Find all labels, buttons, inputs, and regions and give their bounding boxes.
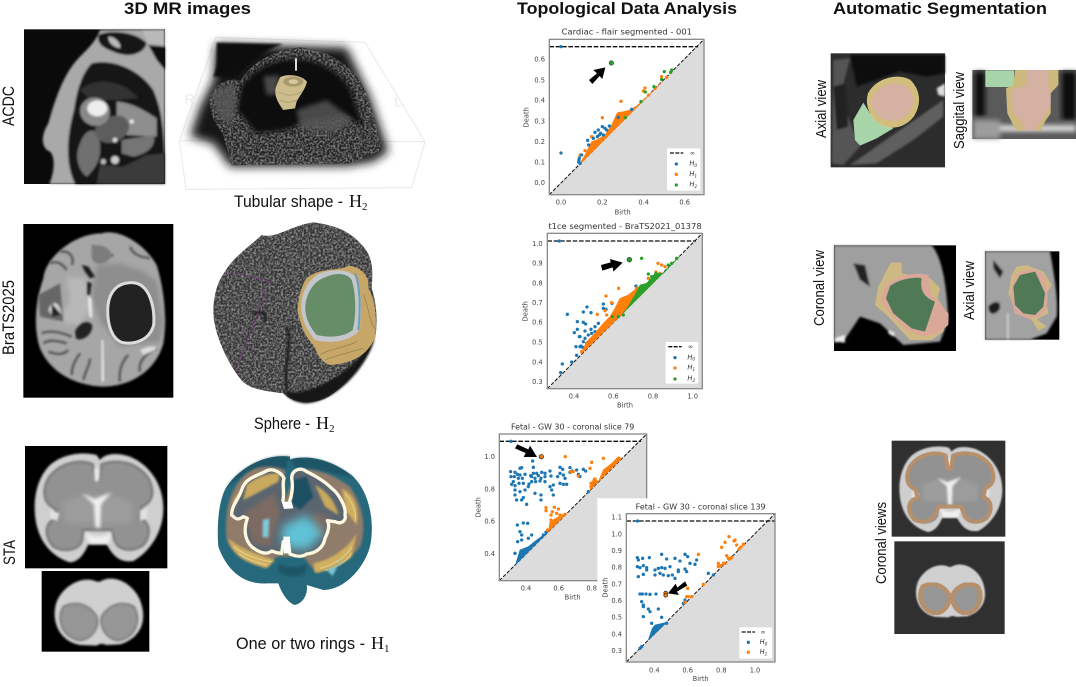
gold and brown outer surface <box>226 467 363 573</box>
y ticks <box>534 56 545 187</box>
caption: One or two rings: 1 <box>384 643 390 655</box>
edema overlay <box>875 263 948 340</box>
label: Saggital view: Saggital view <box>951 72 968 149</box>
chart: Cardiac persistence diagram <box>522 28 704 216</box>
highlighted H1 point <box>539 454 543 459</box>
myocardium ring <box>867 77 919 127</box>
x ticks: 0.4 <box>638 198 649 206</box>
legend: 1 <box>692 367 695 373</box>
y ticks: 0.3 <box>532 378 543 386</box>
x ticks: Birth <box>565 593 581 601</box>
H0 points <box>511 441 588 564</box>
y ticks <box>532 240 543 386</box>
pink overlay <box>1011 70 1051 131</box>
x ticks: 0.2 <box>597 198 608 206</box>
H1 points <box>579 77 667 165</box>
legend: H <box>689 170 694 178</box>
legend: 0 <box>692 357 695 363</box>
y ticks: 0.4 <box>611 630 622 638</box>
x ticks: 0.8 <box>586 585 597 593</box>
white marker <box>295 58 297 71</box>
title: Cardiac - flair segmented - 001 <box>562 28 692 37</box>
legend: 1 <box>765 651 768 657</box>
title: Fetal - GW 30 - coronal slice 139 <box>636 502 766 511</box>
arrow <box>601 259 623 272</box>
edema overlay <box>1008 265 1052 331</box>
interior region inside ring <box>232 469 345 556</box>
x ticks: 0.6 <box>553 585 564 593</box>
legend: H <box>760 648 765 656</box>
x ticks: 0.6 <box>679 198 690 206</box>
gray rim <box>301 270 361 342</box>
y ticks: 0.4 <box>484 550 495 558</box>
y axis label: Death <box>475 497 483 517</box>
title: t1ce segmented - BraTS2021_01378 <box>548 222 702 231</box>
H0 points <box>637 521 713 648</box>
legend: H <box>689 160 694 168</box>
y ticks: 0.9 <box>532 260 543 268</box>
label: Coronal views: Coronal views <box>873 502 890 584</box>
green core <box>305 274 355 337</box>
x ticks: 0.4 <box>649 666 660 674</box>
arrow <box>668 581 687 595</box>
label: Coronal view: Coronal view <box>811 250 828 326</box>
highlighted H2 point <box>609 61 613 65</box>
y axis label: Death <box>601 578 609 598</box>
x ticks: 1.0 <box>687 392 698 400</box>
y ticks: 1.0 <box>484 453 495 461</box>
legend: H <box>760 638 765 646</box>
chart: Fetal slice 79 persistence diagram <box>475 423 647 601</box>
panel: ACDC MR slice <box>24 29 165 184</box>
y ticks: 0.6 <box>534 56 545 64</box>
x ticks: 0.8 <box>716 666 727 674</box>
legend <box>739 627 772 659</box>
white ring <box>232 469 345 556</box>
panel: cardiac sagittal segmentation <box>972 70 1076 139</box>
x ticks <box>569 392 698 410</box>
y ticks: 0.2 <box>534 138 545 146</box>
y axis label: Death <box>521 301 529 321</box>
y ticks: 0.6 <box>532 319 543 327</box>
legend: 2 <box>692 378 695 384</box>
legend: 1 <box>694 173 697 179</box>
L letter: L <box>394 94 402 110</box>
tan tumour shell <box>297 266 376 365</box>
y ticks: 0.7 <box>532 299 543 307</box>
x ticks: Birth <box>615 208 631 216</box>
title: Fetal - GW 30 - coronal slice 79 <box>511 423 634 432</box>
x ticks: Birth <box>617 402 633 410</box>
caption: Tubular shape: Tubular shape -H <box>234 191 362 211</box>
highlighted H1 points <box>664 591 667 597</box>
y ticks: 1.0 <box>611 530 622 538</box>
legend: 0 <box>694 163 697 169</box>
caption: Sphere: 2 <box>329 423 334 435</box>
y ticks: 0.8 <box>611 564 622 572</box>
chart: Fetal slice 139 persistence diagram <box>597 498 782 687</box>
legend: ∞ <box>690 150 695 157</box>
caption: Sphere: Sphere -H <box>254 413 329 433</box>
y ticks: 0.6 <box>611 597 622 605</box>
R letter: R <box>184 91 194 107</box>
x ticks: 0.4 <box>521 585 531 593</box>
legend: H <box>687 364 692 372</box>
green core overlay <box>1013 272 1045 315</box>
y ticks <box>484 453 495 558</box>
enhancing rim overlay <box>880 274 948 337</box>
x ticks: 1.0 <box>750 666 760 674</box>
y ticks: 0.8 <box>484 485 495 493</box>
y ticks: 0.3 <box>611 647 622 655</box>
y ticks: 0.7 <box>611 580 622 588</box>
legend: ∞ <box>688 344 693 351</box>
H1 points <box>581 263 665 355</box>
row label: STA: STA <box>0 539 19 565</box>
y ticks: 0.3 <box>534 117 545 125</box>
green core overlay <box>886 278 935 332</box>
y ticks: 1.1 <box>611 514 622 522</box>
y ticks: 0.4 <box>532 358 543 366</box>
highlighted H2 point <box>627 257 632 262</box>
y ticks: 0.5 <box>532 338 543 346</box>
legend: H <box>687 353 692 361</box>
H2 points <box>612 256 680 317</box>
panel: STA second coronal slice <box>42 571 149 652</box>
rim overlay <box>1010 270 1048 318</box>
panel: tumour axial segmentation <box>985 251 1059 340</box>
legend: H <box>687 375 692 383</box>
cavity <box>872 84 913 121</box>
tan overlay <box>1006 70 1058 131</box>
y ticks <box>611 514 622 655</box>
y axis label: Death <box>522 107 530 127</box>
H1 points <box>685 537 743 602</box>
H1 points <box>546 457 622 532</box>
panel: BraTS MR slice <box>23 224 173 398</box>
legend: 0 <box>765 641 768 647</box>
arrow <box>589 67 605 84</box>
panel: STA 3D fetal brain with rings <box>218 456 372 605</box>
tubular structure <box>275 75 307 110</box>
y ticks: 1.0 <box>532 240 543 248</box>
x ticks: 0.6 <box>682 666 693 674</box>
y ticks: 0.8 <box>532 279 543 287</box>
tumour cavity with bright rim <box>108 283 154 343</box>
y ticks: 0.1 <box>534 159 545 167</box>
wireframe box <box>179 37 425 189</box>
x ticks: 0.6 <box>608 392 619 400</box>
label: Axial view (tumour): Axial view <box>961 261 978 320</box>
green ventricle overlay <box>853 103 893 146</box>
panel: STA coronal slice <box>25 446 167 568</box>
green overlay <box>985 70 1014 87</box>
arrow <box>515 444 537 457</box>
volume body <box>190 44 388 167</box>
panel: BraTS 3D brain with sphere segmentation <box>213 222 377 403</box>
caption: Tubular shape: 2 <box>362 201 368 213</box>
legend <box>667 148 701 191</box>
label: Axial view: Axial view <box>813 80 830 138</box>
teal brain surface <box>218 456 372 605</box>
y ticks: 0.6 <box>484 518 495 526</box>
x ticks <box>649 666 760 683</box>
x ticks: 0.8 <box>648 392 658 400</box>
legend: ∞ <box>761 629 766 636</box>
y ticks: 0.9 <box>611 547 622 555</box>
y ticks: 0.4 <box>534 97 545 105</box>
x ticks: 0.0 <box>556 198 566 206</box>
H0 points <box>559 241 636 373</box>
chart: BraTS persistence diagram <box>521 222 702 410</box>
x ticks: Birth <box>693 675 709 683</box>
H0 points <box>561 47 632 163</box>
panel: tumour coronal segmentation <box>834 245 956 351</box>
panel: fetal coronal segmentation bottom <box>894 541 1005 634</box>
legend <box>665 342 699 384</box>
panel: fetal coronal segmentation top <box>892 441 1005 537</box>
legend: 2 <box>694 184 697 190</box>
y ticks: 0.5 <box>534 76 545 84</box>
y ticks: 0.0 <box>534 179 545 187</box>
caption: One or two rings: One or two rings -H <box>236 633 384 653</box>
x ticks <box>556 198 690 216</box>
x ticks: 0.4 <box>569 392 579 400</box>
y ticks: 0.5 <box>611 614 622 622</box>
panel: cardiac axial segmentation <box>831 53 945 167</box>
x ticks <box>521 585 597 601</box>
legend: H <box>689 181 694 189</box>
H2 points <box>625 70 672 118</box>
panel: ACDC 3D volume with tubular segmentation <box>179 37 425 189</box>
